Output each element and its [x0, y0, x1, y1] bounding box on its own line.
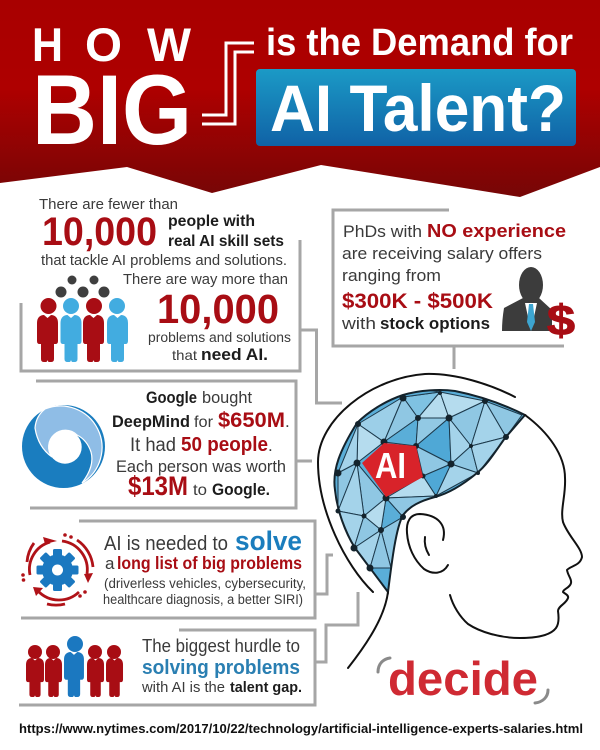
text: PhD salary offers: NO experience [427, 220, 566, 241]
icon: businessman with dollar sign [502, 267, 575, 345]
text: list of big problems [103, 526, 306, 607]
text: list of big problems: AI is needed to [104, 533, 228, 555]
text: DeepMind acquisition: bought [202, 388, 252, 407]
text: way more than 10,000 problems: problems and solutions [148, 330, 291, 345]
title: BIG: BIG [32, 54, 192, 165]
panel: fewer than 10,000 [21, 196, 300, 371]
icon: DeepMind logo [22, 405, 105, 488]
text: way more than 10,000 problems: need AI. [201, 345, 268, 364]
outer hair arc [318, 374, 515, 592]
text: DeepMind acquisition: Each person was worth [116, 457, 286, 476]
text: DeepMind acquisition: Google. [212, 480, 270, 499]
text: biggest hurdle: The biggest hurdle to [142, 636, 300, 656]
text: PhD salary offers [341, 220, 566, 333]
text: fewer than 10,000 people: There are fewer than [39, 196, 178, 213]
text: fewer than 10,000 people: that tackle AI problems and solutions. [41, 253, 287, 269]
text: DeepMind acquisition: to [193, 482, 207, 499]
title: is the Demand for: is the Demand for [266, 22, 573, 64]
AI pentagon [362, 443, 423, 497]
brain network [333, 389, 526, 594]
text: PhD salary offers: $300K - $500K [342, 290, 493, 313]
text: PhD salary offers: are receiving salary offers [342, 244, 542, 263]
text: DeepMind acquisition: for [194, 414, 214, 431]
text: DeepMind acquisition: . [285, 412, 290, 431]
text: PhD salary offers: with [341, 314, 376, 333]
panel: AI needed to solve [21, 521, 315, 618]
AI pentagon: AI [375, 445, 406, 486]
text: fewer than 10,000 people: 10,000 [42, 210, 157, 254]
connector lines to head [296, 330, 454, 662]
text: DeepMind acquisition: It had [130, 435, 176, 456]
text: fewer than 10,000 people: real AI skill sets [168, 233, 284, 250]
head with AI brain [318, 374, 582, 668]
face outline [450, 415, 582, 638]
text: way more than 10,000 problems: 10,000 [157, 286, 279, 332]
title: HOW: H [32, 18, 63, 71]
text: fewer than 10,000 people: people with [168, 213, 255, 230]
text: DeepMind acquisition: DeepMind [112, 412, 190, 431]
source URL: https://www.nytimes.com/2017/10/22/technology/artificial-intelligence-experts-salaries.html [19, 722, 583, 736]
panel: talent gap [19, 630, 315, 705]
text: biggest hurdle: with AI is the [141, 680, 225, 696]
logo: decide: decide [388, 652, 538, 705]
icon: people with dots [37, 276, 128, 362]
connector lines [202, 43, 254, 124]
text: DeepMind acquisition [112, 388, 290, 501]
text: biggest hurdle: solving problems [142, 657, 300, 679]
title: HOW [32, 18, 192, 71]
text: PhD salary offers: PhDs with [343, 222, 422, 241]
text: DeepMind acquisition: 50 people [181, 434, 268, 456]
header banner [0, 0, 600, 197]
panel: PhD salaries [333, 210, 575, 346]
text: DeepMind acquisition: Google [146, 388, 197, 407]
text: DeepMind acquisition: . [268, 436, 273, 455]
text: list of big problems: long list of big problems [117, 553, 302, 573]
text: PhD salary offers: ranging from [342, 266, 441, 285]
icon: businessman with dollar sign: $ [547, 297, 575, 345]
text: PhD salary offers: stock options [380, 314, 490, 333]
icon: gear with red arrows [21, 533, 93, 605]
text: fewer than 10,000 people [39, 196, 287, 269]
ear [407, 514, 448, 573]
text: list of big problems: a [105, 554, 115, 573]
title box: AI Talent?: AI Talent? [270, 71, 566, 145]
text: way more than 10,000 problems: There are way more than [123, 271, 288, 288]
neck line [348, 592, 388, 668]
panel: Google DeepMind [22, 381, 296, 508]
text: list of big problems: (driverless vehicles, cybersecurity, [104, 576, 306, 591]
text: DeepMind acquisition: $650M [218, 409, 285, 432]
text: way more than 10,000 problems [123, 271, 291, 364]
icon: group of five people [26, 636, 123, 697]
text: DeepMind acquisition: $13M [128, 471, 188, 501]
title: HOW: O [85, 18, 122, 71]
text: biggest hurdle: talent gap. [230, 680, 302, 696]
text: list of big problems: healthcare diagnosis, a better SIRI) [103, 592, 303, 607]
text: biggest hurdle [141, 636, 302, 696]
text: way more than 10,000 problems: that [172, 347, 197, 363]
text: list of big problems: solve [235, 526, 302, 556]
title: HOW: W [147, 18, 192, 71]
